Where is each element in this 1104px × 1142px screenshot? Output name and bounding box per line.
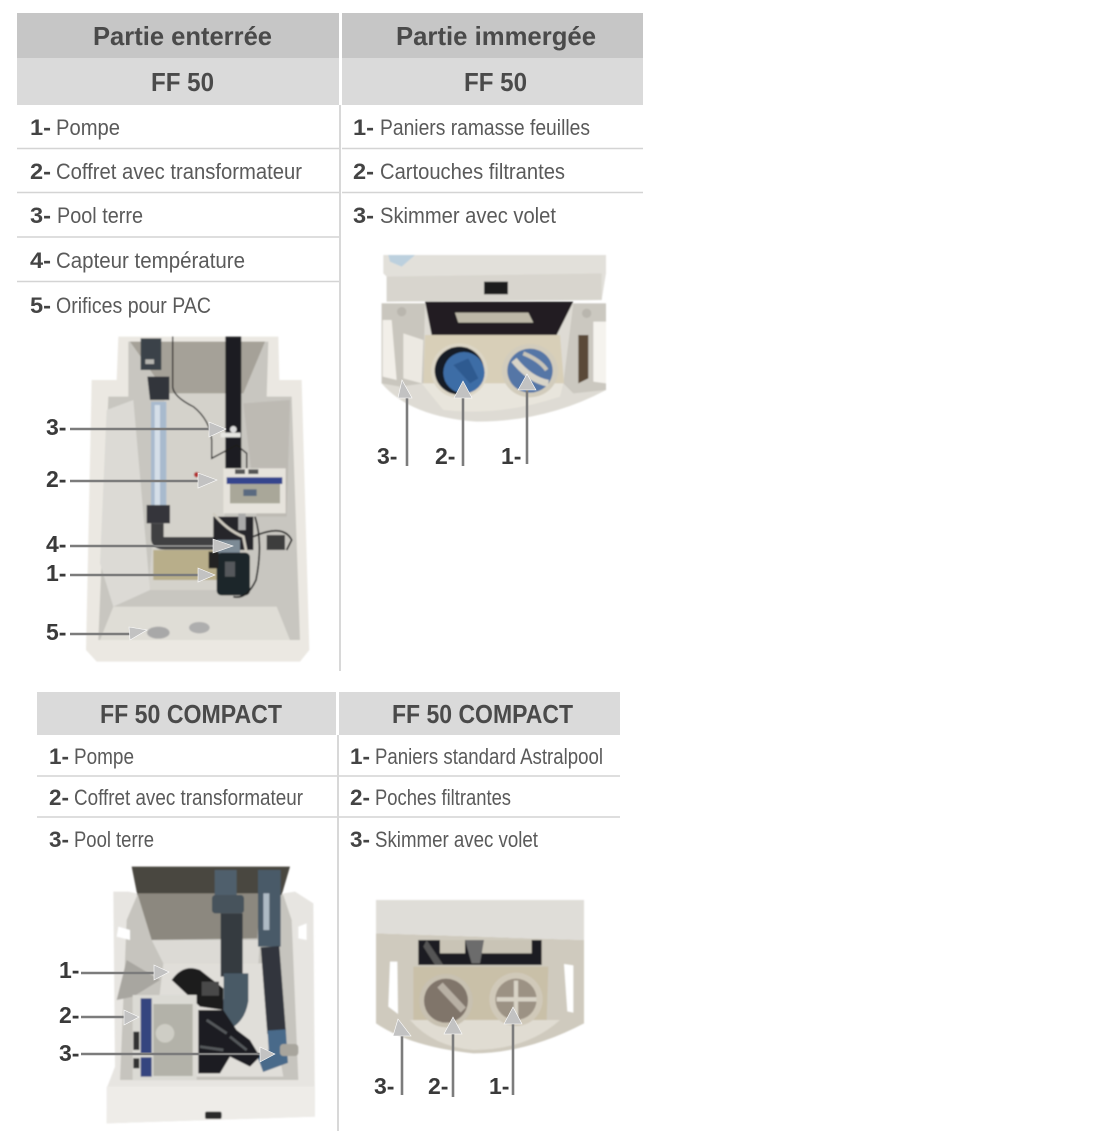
subheading: FF 50 right: FF 50 [464,67,527,97]
item: 1- Pompe [49,744,134,769]
item: 2- Poches filtrantes: Poches filtrantes [375,785,511,810]
item: 2- Coffret avec transformateur: 2- [49,785,69,810]
label 5-: 5- [46,619,66,645]
item: 1- Paniers standard Astralpool: 1- [350,744,370,769]
panel: FF 50 COMPACT table [37,692,620,1131]
item: 3- Pool terre: 3- [49,827,69,852]
item: 1- Pompe: 1- [49,744,69,769]
label 2- [59,1002,139,1028]
item: 2- Poches filtrantes: 2- [350,785,370,810]
labels and arrows: FF 50 COMPACT buried part [59,957,275,1066]
heading: FF 50 COMPACT left [37,692,336,735]
photo: FF 50 COMPACT buried part [107,867,315,1123]
photo: FF 50 immersed part [382,255,606,422]
item: 4- Capteur température: 4- [30,248,51,273]
label 1- [46,560,215,586]
label 1-: 1- [489,1073,509,1099]
item: 3- Skimmer avec volet: 3- [350,827,370,852]
item: 3- Pool terre: Pool terre [74,827,154,852]
labels and arrows: FF 50 COMPACT immersed part [374,1007,522,1099]
item: 3- Skimmer avec volet: Skimmer avec volet [380,203,556,228]
label 2- [46,466,217,492]
labels and arrows: FF 50 immersed part [377,374,536,469]
item: 3- Skimmer avec volet: Skimmer avec volet [375,827,538,852]
label 1- [489,1007,522,1099]
item: 1- Pompe: 1- [30,115,51,140]
item: 2- Cartouches filtrantes: 2- [353,159,374,184]
item: 5- Orifices pour PAC: 5- [30,293,51,318]
label 3- [374,1019,411,1099]
heading: Partie immergée: Partie immergée [396,21,596,51]
heading: Partie enterrée [17,13,339,58]
label 1-: 1- [46,560,66,586]
label 4- [46,531,233,557]
heading: FF 50 COMPACT right: FF 50 COMPACT [392,699,573,729]
label 1- [59,957,169,983]
label 3-: 3- [46,414,66,440]
photo: FF 50 COMPACT immersed part [376,900,584,1053]
label 1-: 1- [501,443,521,469]
item: 3- Skimmer avec volet: 3- [353,203,374,228]
label 2- [435,381,472,469]
label 2-: 2- [435,443,455,469]
item: 2- Coffret avec transformateur: 2- [30,159,51,184]
label 2-: 2- [428,1073,448,1099]
item: 1- Paniers ramasse feuilles: 1- [353,115,374,140]
photo: FF 50 buried part [86,337,309,662]
label 2-: 2- [59,1002,79,1028]
subheading: FF 50 left [17,58,339,105]
item: 5- Orifices pour PAC: Orifices pour PAC [56,293,211,318]
labels and arrows: FF 50 buried part [46,414,233,645]
heading: Partie enterrée: Partie enterrée [93,21,272,51]
item: 2- Coffret avec transformateur: Coffret avec transformateur [56,159,302,184]
item: 3- Pool terre: 3- [30,203,51,228]
label 2-: 2- [46,466,66,492]
heading: FF 50 COMPACT right [339,692,620,735]
panel: FF 50 table [17,13,643,671]
item: 3- Pool terre [49,827,154,852]
label 5- [46,619,147,645]
label 2- [428,1017,462,1099]
item: 1- Paniers ramasse feuilles: Paniers ramasse feuilles [380,115,590,140]
label 4-: 4- [46,531,66,557]
item: 1- Pompe: Pompe [74,744,134,769]
item: 3- Pool terre: Pool terre [57,203,143,228]
label 3- [46,414,226,440]
item: 1- Pompe: Pompe [56,115,120,140]
subheading: FF 50 left: FF 50 [151,67,214,97]
heading: FF 50 COMPACT left: FF 50 COMPACT [100,699,282,729]
label 1-: 1- [59,957,79,983]
label 3- [59,1040,275,1066]
item: 1- Paniers standard Astralpool: Paniers standard Astralpool [375,744,603,769]
item: 2- Coffret avec transformateur: Coffret avec transformateur [74,785,303,810]
label 3-: 3- [374,1073,394,1099]
item: 1- Pompe [30,115,120,140]
item: 4- Capteur température: Capteur température [56,248,245,273]
label 3- [377,380,412,469]
label 1- [501,374,536,469]
heading: Partie immergée [342,13,643,58]
label 3-: 3- [59,1040,79,1066]
item: 2- Cartouches filtrantes: Cartouches filtrantes [380,159,565,184]
label 3-: 3- [377,443,397,469]
subheading: FF 50 right [342,58,643,105]
